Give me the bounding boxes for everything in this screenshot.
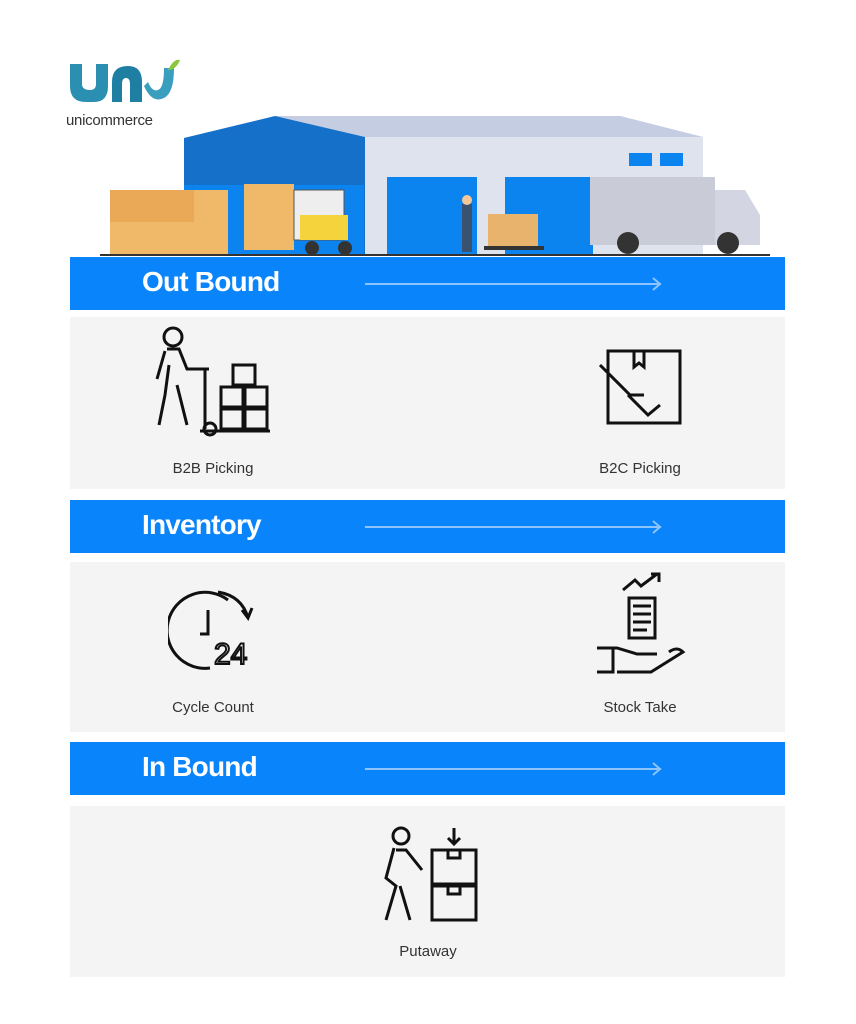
panel: inventory: Stock Take	[603, 699, 677, 716]
icon: stock take	[597, 572, 686, 674]
panel: outbound	[70, 317, 785, 489]
panel: inventory: Cycle Count	[172, 699, 254, 716]
band: In Bound	[70, 742, 785, 795]
band: Out Bound	[70, 257, 785, 310]
band: Inventory: Inventory	[142, 509, 261, 540]
panel: inbound: Putaway	[399, 943, 457, 960]
logo	[66, 60, 180, 129]
icon: B2B picking	[156, 326, 270, 436]
icon: cycle count: 24	[214, 638, 247, 671]
panel: outbound: B2C Picking	[599, 460, 681, 477]
panel: inbound	[70, 806, 785, 977]
illustration: warehouse	[100, 116, 770, 256]
icon: putaway	[384, 826, 478, 922]
icon: cycle count	[168, 590, 254, 671]
panel: inventory	[70, 562, 785, 732]
panel: outbound: B2B Picking	[173, 460, 253, 477]
logo: unicommerce	[66, 112, 153, 129]
icon: B2C picking	[599, 350, 682, 424]
band: Out Bound: Out Bound	[142, 266, 279, 297]
band: Inventory	[70, 500, 785, 553]
band: In Bound: In Bound	[142, 751, 257, 782]
